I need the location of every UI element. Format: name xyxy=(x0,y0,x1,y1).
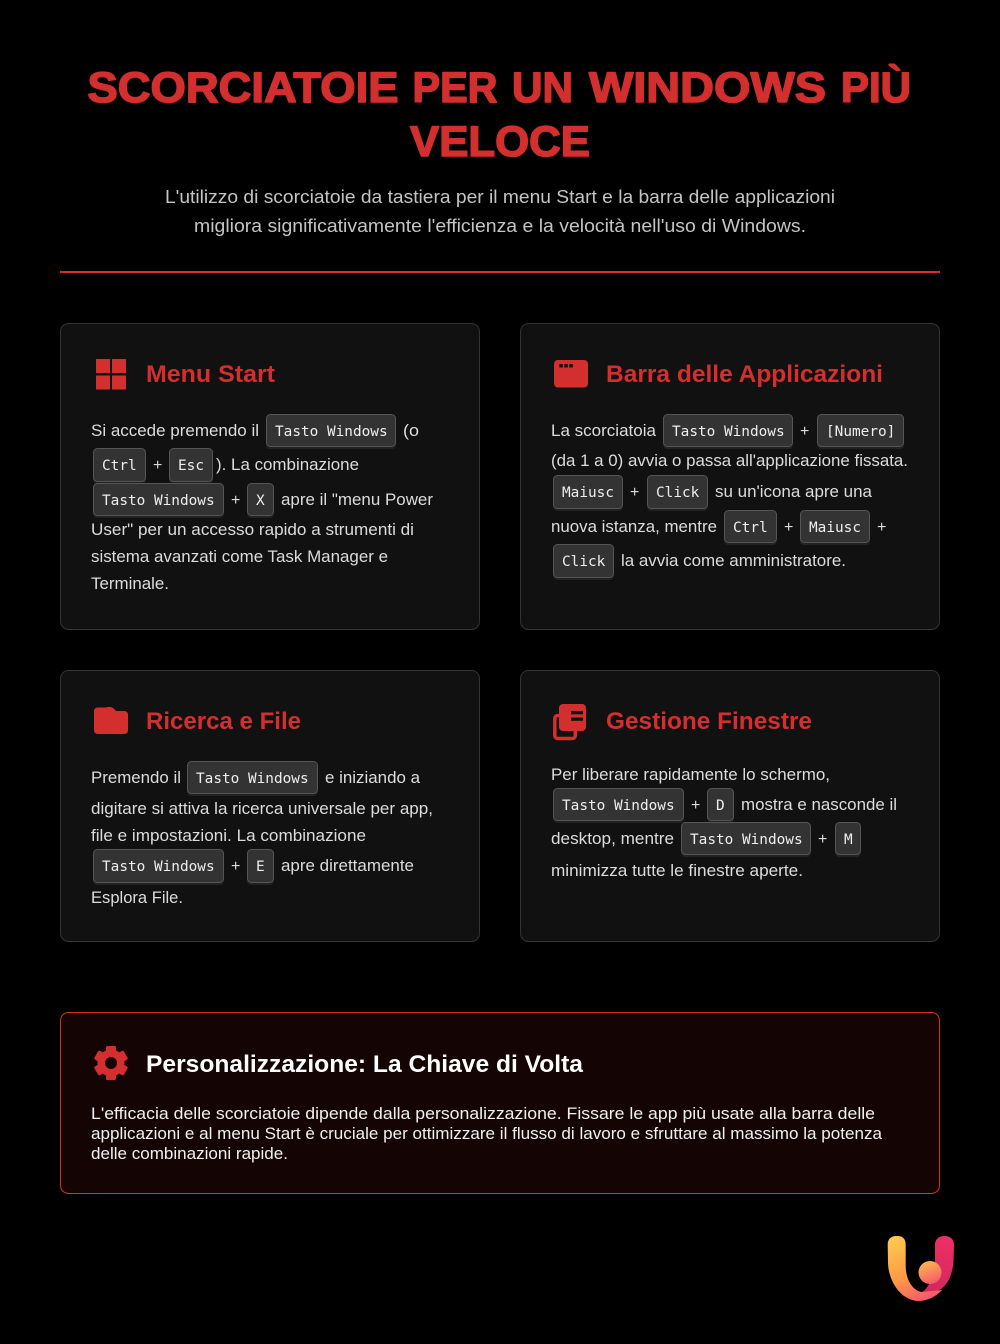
text block: Menu Start body: X xyxy=(256,493,265,509)
icon: gear xyxy=(94,1046,128,1080)
text block: Menu Start body: + xyxy=(153,457,162,474)
heading: Personalizzazione: Personalizzazione: La Chiave di Volta xyxy=(146,1051,583,1078)
text block: Gestione body: mostra e nasconde il xyxy=(741,795,897,814)
panel: Barra delle Applicazioni xyxy=(520,324,940,630)
panel: Personalizzazione xyxy=(60,1012,940,1194)
heading: Menu Start: Menu Start xyxy=(146,361,275,388)
text block: Barra body: su un'icona apre una xyxy=(715,482,873,501)
logo xyxy=(888,1236,954,1301)
title: VELOCE xyxy=(410,118,590,166)
text block: Ricerca body: e iniziando a xyxy=(325,768,421,787)
text block: Barra body: [Numero] xyxy=(826,424,895,440)
text block: Menu Start body: sistema avanzati come Task Manager e xyxy=(91,547,388,566)
text block: Gestione body: minimizza tutte le finestre aperte. xyxy=(551,861,803,880)
text block: Personalizzazione body: L'efficacia delle scorciatoie dipende dalla personalizzazione. Fissare le app più usate alla barra delle xyxy=(91,1104,875,1123)
icon: grid xyxy=(96,359,126,390)
text block: Barra body: Click xyxy=(562,554,606,570)
text block: Gestione body: M xyxy=(844,832,853,848)
text block: Menu Start body: Terminale. xyxy=(91,574,169,593)
text block: Menu Start body: Si accede premendo il xyxy=(91,421,259,440)
text block: Menu Start body: ). La combinazione xyxy=(216,455,359,474)
text block: Personalizzazione body: delle combinazioni rapide. xyxy=(91,1144,288,1163)
text block: Barra body: Tasto Windows xyxy=(672,424,785,440)
title: WINDOWS xyxy=(589,64,826,112)
text block: Ricerca body: file e impostazioni. La combinazione xyxy=(91,826,366,845)
text block: Barra body: Ctrl xyxy=(733,520,768,536)
heading: Gestione Finestre: Gestione Finestre xyxy=(606,708,812,735)
text block: Menu Start body xyxy=(91,414,433,593)
text block: Gestione body: desktop, mentre xyxy=(551,829,674,848)
text block: Gestione body: Per liberare rapidamente lo schermo, xyxy=(551,765,830,784)
icon: stacked windows xyxy=(555,704,586,738)
panel: Gestione Finestre xyxy=(520,670,940,942)
icon: app window xyxy=(554,360,588,388)
title: PIÙ xyxy=(841,63,911,112)
text block: Menu Start body: User" per un accesso rapido a strumenti di xyxy=(91,520,414,539)
icon: folder xyxy=(94,707,128,734)
panel: Ricerca e File xyxy=(60,670,480,942)
text block: Ricerca body: apre direttamente xyxy=(281,856,414,875)
text block: Ricerca body: Tasto Windows xyxy=(196,771,309,787)
subtitle: L'utilizzo di scorciatoie da tastiera per il menu Start e la barra delle applicazioni xyxy=(165,186,835,207)
text block: Gestione body: D xyxy=(716,798,725,814)
text block: Menu Start body: apre il "menu Power xyxy=(281,490,433,509)
text block: Barra body: Maiusc xyxy=(809,520,861,536)
text block: Barra body: + xyxy=(877,519,886,536)
title: PER xyxy=(412,64,498,112)
text block: Ricerca body: E xyxy=(256,859,265,875)
subtitle xyxy=(165,186,835,236)
heading: Barra delle Applicazioni: Barra delle Applicazioni xyxy=(606,361,883,388)
title xyxy=(88,63,911,166)
heading: Ricerca e File: Ricerca e File xyxy=(146,708,301,735)
text block: Menu Start body: Esc xyxy=(178,458,204,474)
panel: Menu Start xyxy=(60,324,480,630)
text block: Ricerca body: digitare si attiva la ricerca universale per app, xyxy=(91,799,433,818)
text block: Ricerca body: + xyxy=(231,858,240,875)
text block: Menu Start body: Tasto Windows xyxy=(102,493,215,509)
subtitle: migliora significativamente l'efficienza e la velocità nell'uso di Windows. xyxy=(194,215,806,236)
text block: Ricerca body: Premendo il xyxy=(91,768,181,787)
text block: Gestione body: Tasto Windows xyxy=(562,798,675,814)
title: UN xyxy=(512,64,573,112)
text block: Barra body: La scorciatoia xyxy=(551,421,657,440)
text block: Ricerca body xyxy=(91,762,433,907)
text block: Gestione body: Tasto Windows xyxy=(690,832,803,848)
text block: Menu Start body: (o xyxy=(403,421,419,440)
text block: Barra body: (da 1 a 0) avvia o passa all'applicazione fissata. xyxy=(551,451,908,470)
text block: Barra body xyxy=(551,414,908,580)
text block: Barra body: la avvia come amministratore. xyxy=(621,551,846,570)
text block: Barra body: + xyxy=(800,423,809,440)
text block: Barra body: + xyxy=(784,519,793,536)
text block: Ricerca body: Tasto Windows xyxy=(102,859,215,875)
text block: Barra body: + xyxy=(630,484,639,501)
text block: Menu Start body: Tasto Windows xyxy=(275,424,388,440)
text block: Ricerca body: Esplora File. xyxy=(91,888,183,907)
title: SCORCIATOIE xyxy=(88,64,398,112)
text block: Gestione body: + xyxy=(818,831,827,848)
text block: Personalizzazione body xyxy=(91,1104,883,1163)
text block: Gestione body xyxy=(551,765,897,880)
text block: Barra body: nuova istanza, mentre xyxy=(551,517,717,536)
text block: Gestione body: + xyxy=(691,797,700,814)
text block: Personalizzazione body: applicazioni e al menu Start è cruciale per ottimizzare il flusso di lavoro e sfruttare al massimo la potenza xyxy=(91,1124,883,1143)
text block: Menu Start body: Ctrl xyxy=(102,458,137,474)
text block: Menu Start body: + xyxy=(231,492,240,509)
text block: Barra body: Maiusc xyxy=(562,485,614,501)
text block: Barra body: Click xyxy=(656,485,700,501)
